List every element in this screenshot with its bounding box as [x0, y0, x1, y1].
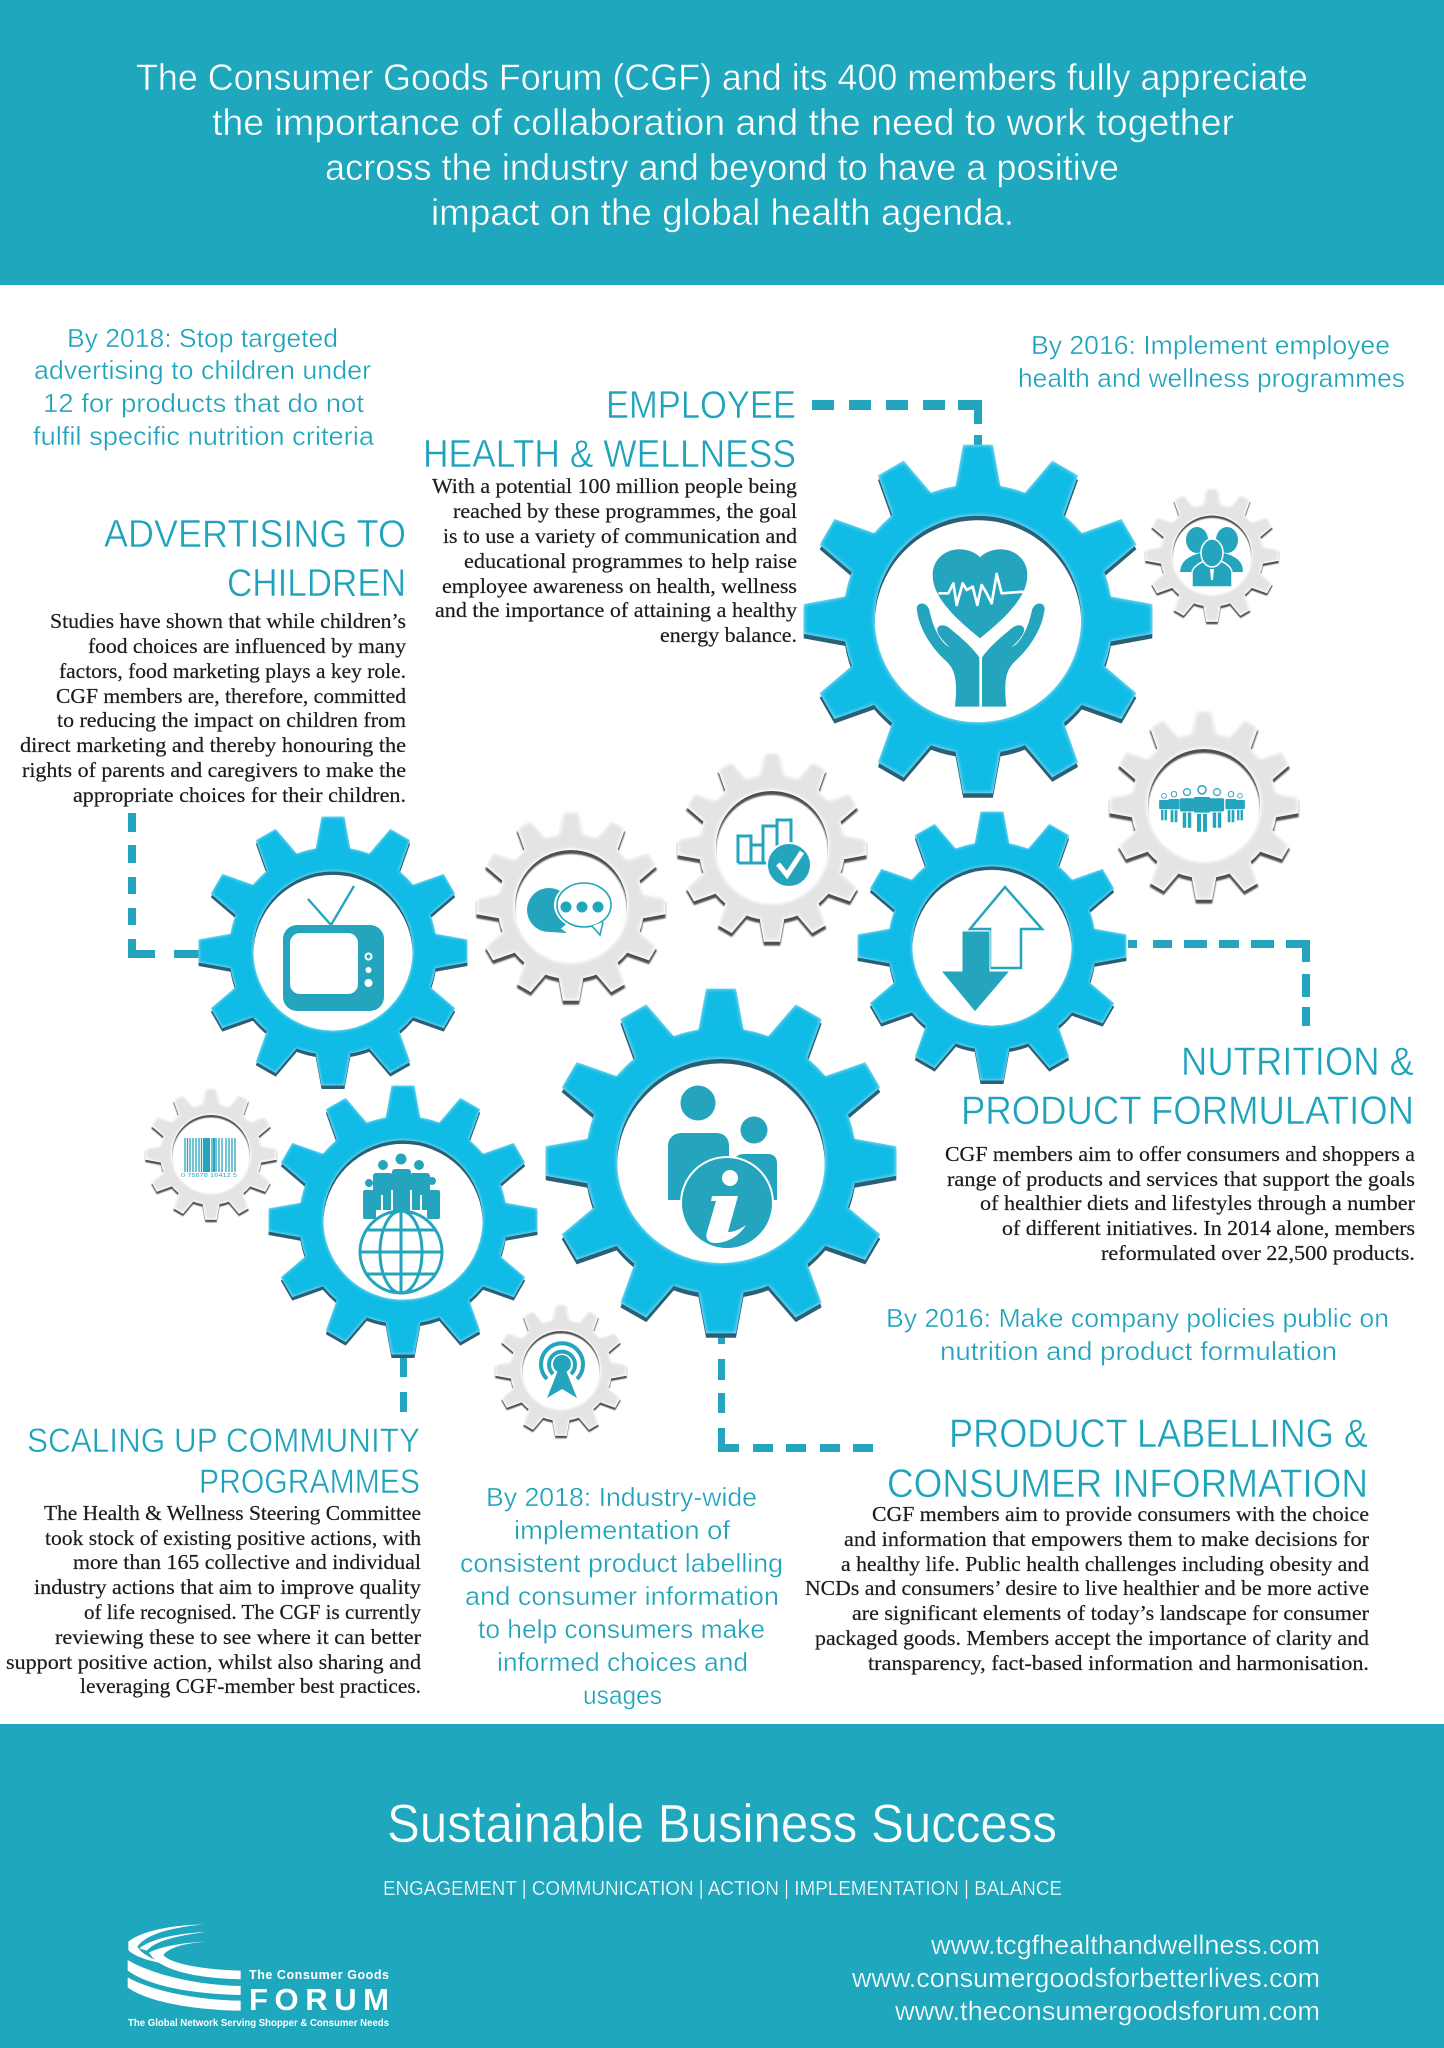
heading: advertising to children: CHILDREN: [227, 562, 406, 605]
text block: labelling body: [805, 1502, 1370, 1675]
heading: product labelling and consumer information: CONSUMER INFORMATION: [887, 1462, 1368, 1506]
heading: product labelling and consumer information: PRODUCT LABELLING &: [949, 1412, 1368, 1456]
callout: by 2016 nutrition target: nutrition and product formulation: [940, 1336, 1337, 1366]
panel: footer banner: [0, 1724, 1444, 2048]
callout: by 2018 labelling target: consistent product labelling: [460, 1548, 783, 1578]
text block: website links: [851, 1930, 1320, 2026]
text block: advertising body: [20, 609, 407, 807]
callout: by 2016 nutrition target: [886, 1303, 1389, 1366]
title: intro statement: across the industry and beyond to have a positive: [325, 147, 1119, 188]
text block: scaling up body: The Health & Wellness Steering Committee: [44, 1501, 421, 1525]
heading: nutrition and product formulation: [961, 1040, 1414, 1133]
text block: scaling up body: [6, 1501, 422, 1698]
gear: grey barcode: [145, 1088, 277, 1220]
text block: employee health body: energy balance.: [660, 623, 797, 647]
heading: employee health and wellness: EMPLOYEE: [606, 384, 796, 427]
connector: advertising text to tv gear: [128, 813, 200, 958]
title: intro statement: impact on the global health agenda.: [431, 192, 1014, 233]
connector: info gear to labelling heading: [718, 1335, 873, 1452]
callout: by 2016 employee target: health and wellness programmes: [1018, 363, 1405, 393]
text block: scaling up body: took stock of existing positive actions, with: [45, 1526, 422, 1550]
text block: advertising body: food choices are influenced by many: [88, 634, 406, 658]
text block: labelling body: NCDs and consumers’ desire to live healthier and be more active: [805, 1576, 1369, 1600]
text block: employee health body: is to use a variety of communication and: [443, 524, 798, 548]
text block: nutrition body: [945, 1142, 1416, 1265]
text block: employee health body: employee awareness on health, wellness: [442, 574, 797, 598]
heading: scaling up community programmes: PROGRAMMES: [199, 1463, 420, 1501]
text block: labelling body: CGF members aim to provide consumers with the choice: [872, 1502, 1369, 1526]
icon: row of people: [1159, 786, 1245, 832]
icon: people on globe: [360, 1154, 442, 1293]
text block: nutrition body: of different initiatives. In 2014 alone, members: [1002, 1216, 1415, 1240]
text block: advertising body: to reducing the impact on children from: [57, 708, 406, 732]
gear: grey chart: [677, 752, 867, 942]
callout: by 2018 labelling target: to help consumers make: [478, 1614, 765, 1644]
text block: nutrition body: CGF members aim to offer consumers and shoppers a: [945, 1142, 1416, 1166]
connector: nutrition gear to heading: [1128, 940, 1310, 1026]
callout: by 2016 nutrition target: By 2016: Make company policies public on: [886, 1303, 1389, 1333]
text block: values strip: ENGAGEMENT | COMMUNICATION | ACTION | IMPLEMENTATION | BALANCE: [383, 1878, 1062, 1900]
text block: advertising body: Studies have shown that while children’s: [50, 609, 406, 633]
connector: employee heading to gear: [812, 400, 982, 449]
heading: employee health and wellness: HEALTH & WELLNESS: [423, 433, 796, 476]
callout: by 2018 labelling target: informed choices and: [497, 1647, 748, 1677]
text block: scaling up body: of life recognised. The CGF is currently: [84, 1600, 421, 1624]
heading: employee health and wellness: [423, 384, 796, 476]
text block: advertising body: rights of parents and caregivers to make the: [22, 758, 406, 782]
gear: grey team: [1145, 488, 1279, 622]
text block: nutrition body: range of products and services that support the goals: [947, 1167, 1415, 1191]
text block: scaling up body: more than 165 collective and individual: [73, 1550, 421, 1574]
logo: the consumer goods forum: The Global Network Serving Shopper & Consumer Needs: [128, 2017, 389, 2029]
logo: the consumer goods forum: FORUM: [249, 1982, 389, 2017]
gear: advertising tv: [199, 817, 467, 1085]
panel: top banner: [0, 0, 1444, 285]
title: intro statement: [136, 57, 1308, 233]
callout: by 2018 advertising target: 12 for products that do not: [43, 388, 365, 418]
text block: labelling body: a healthy life. Public health challenges including obesity and: [841, 1552, 1370, 1576]
icon: barcode: 0 75678 16412 5: [181, 1173, 237, 1179]
icon: people with info badge: [668, 1086, 777, 1249]
text block: labelling body: packaged goods. Members accept the importance of clarity and: [815, 1626, 1370, 1650]
text block: labelling body: transparency, fact-based information and harmonisation.: [868, 1651, 1369, 1675]
text block: scaling up body: leveraging CGF-member best practices.: [80, 1674, 421, 1698]
callout: by 2018 labelling target: implementation of: [514, 1515, 731, 1545]
gear: community globe: [269, 1086, 537, 1354]
callout: by 2016 employee target: [1018, 330, 1405, 393]
callout: by 2018 advertising target: By 2018: Stop targeted: [67, 323, 338, 353]
text block: scaling up body: industry actions that aim to improve quality: [34, 1575, 422, 1599]
gear: grey speech: [476, 811, 666, 1001]
icon: bar chart with check: [738, 820, 811, 887]
text block: labelling body: and information that empowers them to make decisions for: [844, 1527, 1369, 1551]
logo: the consumer goods forum: The Consumer Goods: [249, 1968, 389, 1982]
callout: by 2018 labelling target: and consumer information: [465, 1581, 779, 1611]
gear: employee health: [804, 445, 1152, 793]
gear: nutrition: [858, 812, 1126, 1080]
title: intro statement: The Consumer Goods Forum (CGF) and its 400 members fully appreciate: [136, 57, 1308, 98]
text block: advertising body: direct marketing and thereby honouring the: [20, 733, 406, 757]
callout: by 2018 labelling target: By 2018: Industry-wide: [486, 1482, 757, 1512]
title: intro statement: the importance of collaboration and the need to work together: [212, 102, 1234, 143]
heading: nutrition and product formulation: PRODUCT FORMULATION: [961, 1089, 1414, 1133]
text block: nutrition body: reformulated over 22,500 products.: [1101, 1241, 1415, 1265]
text block: website links: www.theconsumergoodsforum.com: [894, 1996, 1320, 2026]
icon: team of three: [1180, 527, 1243, 587]
text block: nutrition body: of healthier diets and lifestyles through a number: [980, 1191, 1415, 1215]
icon: up and down arrows: [941, 887, 1042, 1012]
callout: by 2018 labelling target: [460, 1482, 783, 1710]
text block: employee health body: reached by these programmes, the goal: [453, 499, 797, 523]
text block: employee health body: and the importance of attaining a healthy: [435, 598, 798, 622]
callout: by 2018 labelling target: usages: [583, 1680, 662, 1710]
heading: scaling up community programmes: [27, 1422, 420, 1501]
callout: by 2018 advertising target: fulfil specific nutrition criteria: [33, 421, 375, 451]
heading: advertising to children: [104, 513, 406, 605]
heading: sustainable business success: Sustainable Business Success: [387, 1794, 1057, 1854]
heading: scaling up community programmes: SCALING UP COMMUNITY: [27, 1422, 420, 1460]
gear: grey crowd: [1109, 710, 1299, 900]
text block: advertising body: factors, food marketing plays a key role.: [59, 659, 406, 683]
icon: heart in hands: [917, 549, 1045, 707]
icon: broadcast antenna: [541, 1343, 583, 1398]
callout: by 2018 advertising target: advertising to children under: [34, 355, 371, 385]
callout: by 2018 advertising target: [33, 323, 375, 451]
text block: employee health body: educational programmes to help raise: [464, 549, 797, 573]
text block: advertising body: CGF members are, therefore, committed: [56, 684, 407, 708]
heading: nutrition and product formulation: NUTRITION &: [1181, 1040, 1414, 1084]
text block: advertising body: appropriate choices for their children.: [73, 783, 406, 807]
gear: grey antenna: [495, 1304, 627, 1436]
callout: by 2016 employee target: By 2016: Implement employee: [1031, 330, 1390, 360]
text block: website links: www.consumergoodsforbetterlives.com: [851, 1963, 1320, 1993]
heading: advertising to children: ADVERTISING TO: [104, 513, 406, 556]
text block: scaling up body: reviewing these to see where it can better: [55, 1625, 421, 1649]
text block: employee health body: [432, 474, 798, 647]
text block: website links: www.tcgfhealthandwellness.com: [930, 1930, 1320, 1960]
connector: globe gear to scaling heading: [400, 1358, 407, 1412]
text block: labelling body: are significant elements of today’s landscape for consumer: [852, 1601, 1369, 1625]
gear: product labelling information: [546, 989, 896, 1333]
icon: speech bubbles: [527, 881, 614, 935]
logo: the consumer goods forum: [128, 1924, 389, 2029]
heading: product labelling and consumer information: [887, 1412, 1368, 1506]
text block: scaling up body: support positive action, whilst also sharing and: [6, 1650, 422, 1674]
text block: employee health body: With a potential 100 million people being: [432, 474, 798, 498]
icon: television: [283, 886, 384, 1011]
